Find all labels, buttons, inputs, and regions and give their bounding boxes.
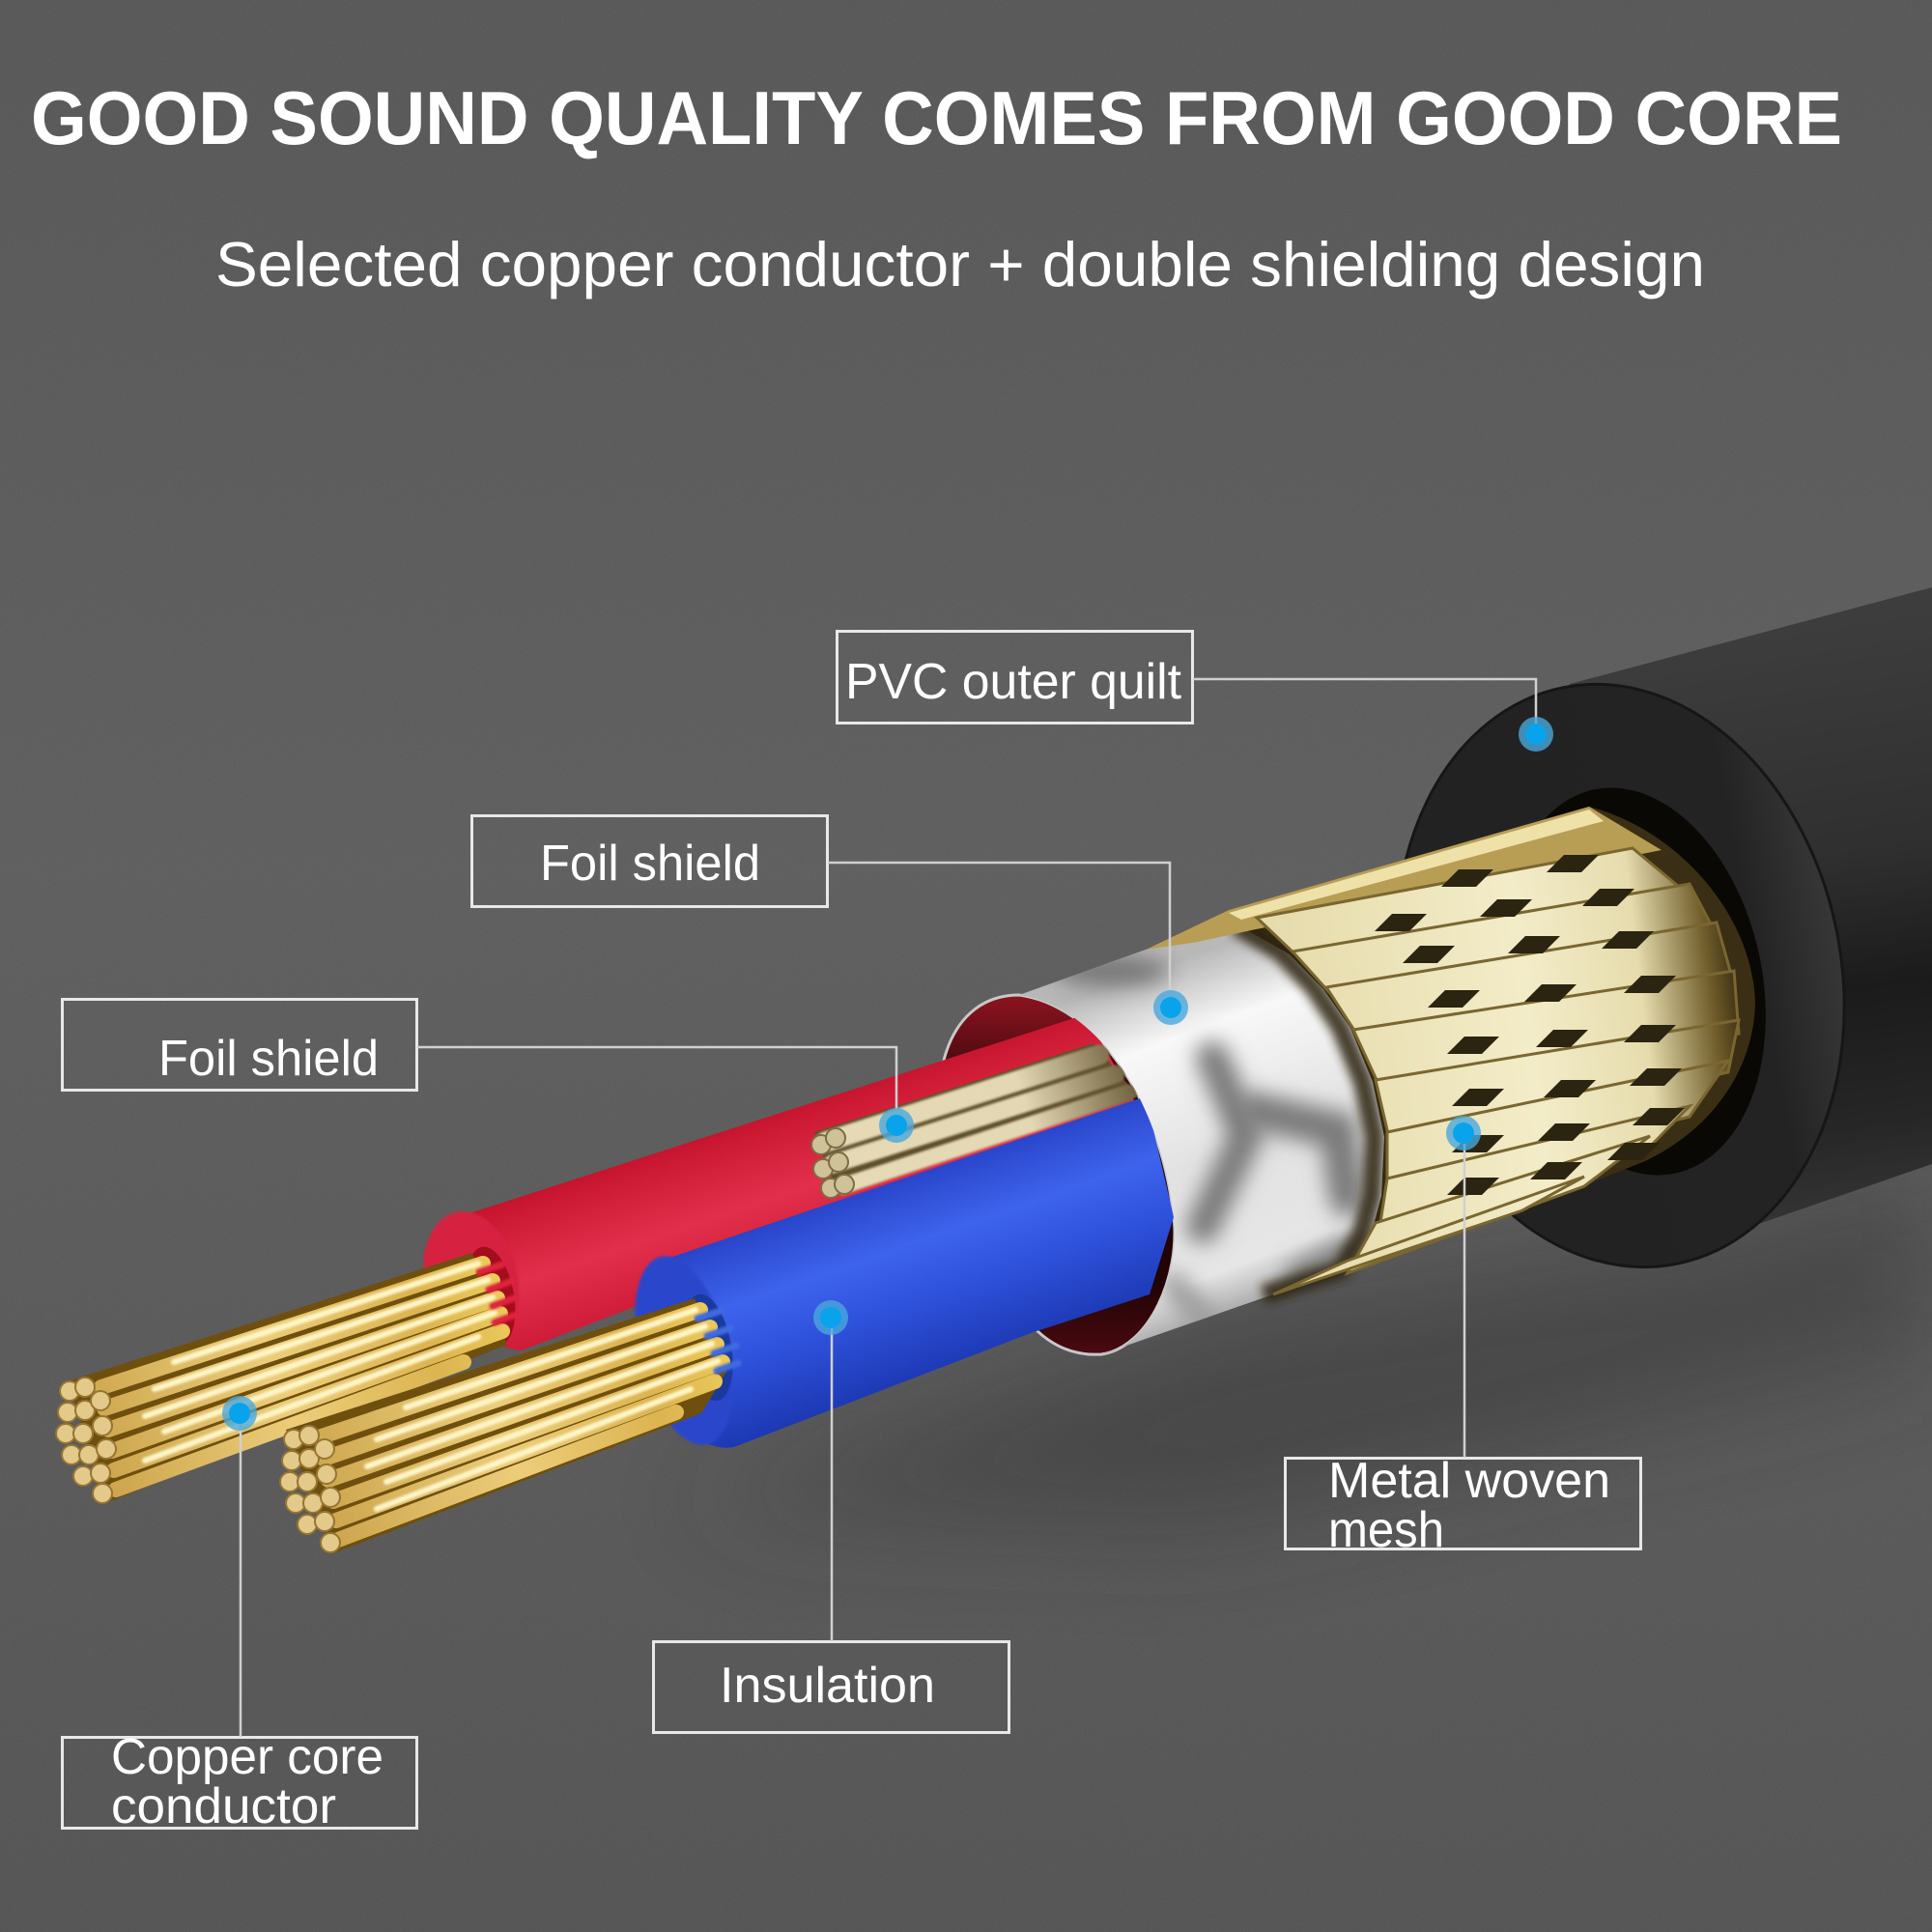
blue insulated wire bbox=[617, 1096, 1174, 1455]
subtitle: Selected copper conductor + double shielding design bbox=[215, 229, 1705, 299]
callout: PVC outer quilt: PVC outer quilt bbox=[845, 654, 1182, 710]
callout: Metal woven mesh: Metal woven bbox=[1328, 1453, 1610, 1509]
copper strands A bbox=[56, 1253, 516, 1503]
red insulated wire bbox=[411, 1014, 1140, 1358]
callout: Metal woven mesh: mesh bbox=[1328, 1502, 1444, 1558]
title: GOOD SOUND QUALITY COMES FROM GOOD CORE bbox=[31, 75, 1842, 160]
foil interior bbox=[940, 995, 1175, 1354]
callout: Insulation bbox=[653, 1300, 1009, 1733]
tan inner strands bbox=[811, 1043, 1138, 1198]
callout: Metal woven mesh bbox=[1285, 1116, 1640, 1558]
foil shield bbox=[1019, 925, 1384, 1354]
callout: PVC outer quilt bbox=[837, 632, 1553, 752]
callout: Foil shield (inner strands): Foil shield bbox=[158, 1031, 379, 1087]
callout: Copper core conductor: Copper core bbox=[111, 1729, 384, 1785]
callout: Copper core conductor: conductor bbox=[111, 1778, 336, 1834]
cable illustration bbox=[56, 587, 1932, 1553]
cable shadow bbox=[676, 1159, 1932, 1526]
callout: Insulation: Insulation bbox=[720, 1658, 935, 1714]
callout: Foil shield (foil layer) bbox=[471, 815, 1188, 1025]
metal woven braid bbox=[1146, 807, 1739, 1294]
callout: Foil shield (foil layer): Foil shield bbox=[540, 836, 760, 892]
callout: Copper core conductor bbox=[62, 1396, 417, 1834]
callout: Foil shield (inner strands) bbox=[62, 999, 914, 1143]
black PVC jacket bbox=[1347, 587, 1932, 1306]
braid base bbox=[1146, 807, 1755, 1294]
copper strands B bbox=[280, 1298, 738, 1553]
